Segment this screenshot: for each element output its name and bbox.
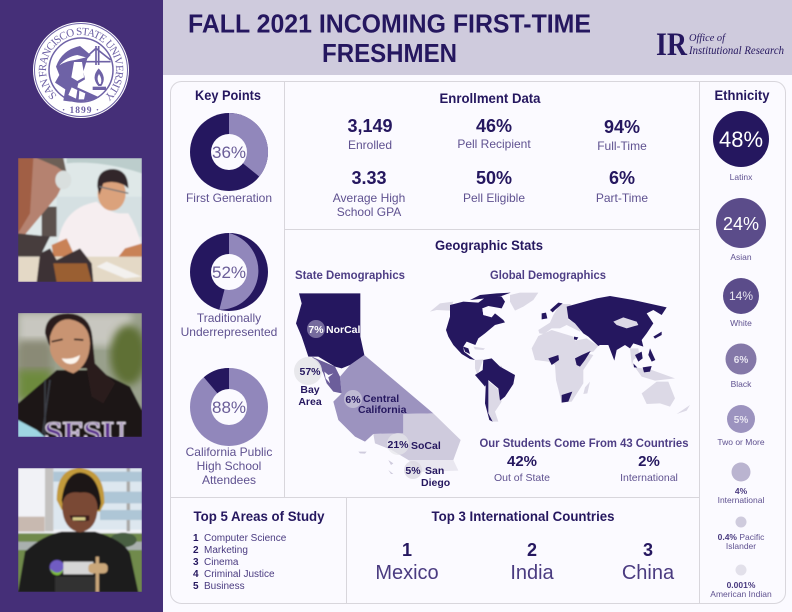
list: areas of study: Marketing <box>204 545 248 556</box>
bubble: black: 6% <box>734 355 748 366</box>
stat: out of state: 42% <box>507 453 537 470</box>
label: norcal 7% <box>307 320 361 338</box>
bubble: two or more: Two or More <box>717 437 765 447</box>
stat: pell eligible: Pell Eligible <box>463 191 525 205</box>
list: areas of study: 5 <box>193 581 199 592</box>
label: norcal 7%: NorCal <box>326 324 361 336</box>
region: southern california <box>373 413 461 460</box>
label: central california 6%: Central <box>363 393 399 405</box>
stat: international <box>620 453 678 484</box>
label: central california 6%: 6% <box>345 394 361 406</box>
donut: first generation 36% <box>186 113 272 205</box>
label: san diego 5%: Diego <box>421 477 450 489</box>
heading: global demographics: Global Demographics <box>490 268 606 282</box>
list: areas of study: Business <box>204 581 245 592</box>
stat: enrolled: Enrolled <box>348 138 392 152</box>
bubble: black: Black <box>731 379 752 389</box>
stat: international: 2% <box>638 453 660 470</box>
country: china: China <box>622 562 675 584</box>
stat: part-time: 6% <box>609 168 635 188</box>
label: socal 21% <box>387 433 441 455</box>
logo: office of institutional research: IR <box>656 27 688 63</box>
panel: geographic stats: Geographic Stats <box>435 237 543 253</box>
panel: top 5 areas of study: Top 5 Areas of Study <box>194 509 325 524</box>
label: bay area 57%: 57% <box>299 366 321 378</box>
label: san diego 5%: 5% <box>405 465 421 477</box>
country: mexico: 1 <box>402 540 412 560</box>
label: san diego 5%: San <box>425 465 444 477</box>
donut: california public high school attendees 88%: Attendees <box>202 473 256 487</box>
country: china: 3 <box>643 540 653 560</box>
panel: top 3 international countries <box>375 509 675 584</box>
region: central california <box>333 355 433 442</box>
panel: ethnicity <box>710 87 772 599</box>
label: bay area 57%: Area <box>298 396 322 408</box>
stat: enrolled <box>347 116 393 152</box>
bubble: international <box>718 462 764 505</box>
list: areas of study: Cinema <box>204 557 239 568</box>
list: areas of study: Computer Science <box>204 533 287 544</box>
bubble: asian: 24% <box>723 214 759 234</box>
stat: pell recipient: Pell Recipient <box>457 137 531 151</box>
panel: enrollment data: Enrollment Data <box>440 90 541 106</box>
bubble: latinx <box>713 111 769 182</box>
icon: university seal: SAN FRANCISCO STATE UNIVERSITY <box>38 28 124 102</box>
donut: california public high school attendees 88%: California Public <box>186 445 272 459</box>
photo: student in white polo <box>18 158 142 282</box>
donut: california public high school attendees 88%: 88% <box>212 398 246 417</box>
label: bay area 57%: Bay <box>300 384 320 396</box>
bubble: american indian <box>710 564 772 599</box>
stat: pell recipient <box>457 116 531 151</box>
donut: traditionally underrepresented 52%: 52% <box>212 263 246 282</box>
logo: office of institutional research: Institutional Research <box>688 45 784 57</box>
photo: student in yellow beanie <box>18 468 142 592</box>
label: central california 6% <box>344 390 407 416</box>
country: mexico <box>375 540 439 584</box>
bubble: latinx: Latinx <box>730 172 753 182</box>
logo: office of institutional research: Office of <box>689 32 727 44</box>
donut: first generation 36%: 36% <box>212 143 246 162</box>
photo: smiling student in SFSU hoodie: SFSU <box>44 418 126 449</box>
stat: part-time: Part-Time <box>596 191 648 205</box>
list: areas of study: 2 <box>193 545 199 556</box>
logo: office of institutional research <box>656 27 784 63</box>
donut: california public high school attendees 88% <box>186 368 272 487</box>
bubble: asian: Asian <box>730 252 752 262</box>
main card <box>170 82 786 604</box>
region: san diego <box>408 460 458 472</box>
list: areas of study <box>193 533 287 592</box>
stat: full-time: Full-Time <box>597 139 647 153</box>
donut: traditionally underrepresented 52%: Underrepresented <box>181 325 277 339</box>
bubble: american indian: 0.001% <box>727 580 756 590</box>
bubble: pacific islander: 0.4% Pacific <box>718 532 765 542</box>
stat: pell eligible <box>463 168 525 205</box>
label: norcal 7%: 7% <box>308 324 324 336</box>
region: bay area <box>312 357 342 393</box>
donut: california public high school attendees 88%: High School <box>197 459 261 473</box>
label: central california 6%: California <box>358 404 407 416</box>
stat: out of state: Out of State <box>494 472 550 484</box>
bubble: american indian: American Indian <box>710 589 772 599</box>
label: san diego 5% <box>404 461 450 489</box>
panel: ethnicity: Ethnicity <box>714 87 770 103</box>
stat: average high school gpa <box>333 168 405 219</box>
stat: enrolled: 3,149 <box>347 116 393 136</box>
panel: top 5 areas of study <box>193 509 325 592</box>
stat: part-time <box>596 168 648 205</box>
region: northern california <box>296 293 364 368</box>
bubble: white: 14% <box>729 289 753 303</box>
donut: first generation 36%: First Generation <box>186 191 272 205</box>
stat: pell eligible: 50% <box>476 168 512 188</box>
stat: average high school gpa: Average High <box>333 191 405 205</box>
bubble: international: 4% <box>735 486 748 496</box>
list: areas of study: 1 <box>193 533 199 544</box>
icon: university seal: · 1899 · <box>62 106 100 116</box>
bubble: white <box>723 278 759 328</box>
heading: state demographics: State Demographics <box>295 268 405 282</box>
country: india: India <box>510 562 555 584</box>
donut: traditionally underrepresented 52% <box>181 233 277 339</box>
panel: geographic stats <box>294 237 690 489</box>
stat: full-time <box>597 117 647 153</box>
panel: top 3 international countries: Top 3 International Countries <box>432 509 614 524</box>
country: mexico: Mexico <box>375 562 439 584</box>
stat: average high school gpa: School GPA <box>337 205 401 219</box>
map: world <box>430 293 690 422</box>
stat: international: International <box>620 472 678 484</box>
text: countries count: Our Students Come From 43 Countries <box>480 436 689 450</box>
stat: out of state <box>494 453 550 484</box>
panel: enrollment data <box>333 90 648 219</box>
bubble: black <box>726 344 756 389</box>
stat: pell recipient: 46% <box>476 116 512 136</box>
country: india <box>510 540 555 584</box>
bubble: pacific islander <box>718 516 765 551</box>
label: socal 21%: SoCal <box>411 440 441 452</box>
list: areas of study: Criminal Justice <box>204 569 275 580</box>
stat: full-time: 94% <box>604 117 640 137</box>
title: FRESHMEN <box>322 38 457 68</box>
sidebar <box>0 0 163 612</box>
bubble: white: White <box>730 318 752 328</box>
bubble: pacific islander: Islander <box>726 541 756 551</box>
stat: average high school gpa: 3.33 <box>351 168 387 188</box>
title <box>188 8 591 68</box>
panel: key points <box>181 87 277 487</box>
title: FALL 2021 INCOMING FIRST-TIME <box>188 8 591 38</box>
bubble: latinx: 48% <box>719 127 763 152</box>
map: california regions <box>296 293 461 474</box>
panel: key points: Key Points <box>195 87 261 103</box>
photo: smiling student in SFSU hoodie <box>18 313 142 437</box>
country: india: 2 <box>527 540 537 560</box>
label: bay area 57% <box>294 357 322 408</box>
bubble: two or more: 5% <box>734 415 748 426</box>
donut: traditionally underrepresented 52%: Traditionally <box>197 311 261 325</box>
bubble: asian <box>716 198 766 262</box>
bubble: two or more <box>717 405 765 447</box>
list: areas of study: 4 <box>193 569 199 580</box>
list: areas of study: 3 <box>193 557 199 568</box>
header band <box>163 0 792 75</box>
country: china <box>622 540 675 584</box>
label: socal 21%: 21% <box>387 439 409 451</box>
bubble: international: International <box>718 495 764 505</box>
